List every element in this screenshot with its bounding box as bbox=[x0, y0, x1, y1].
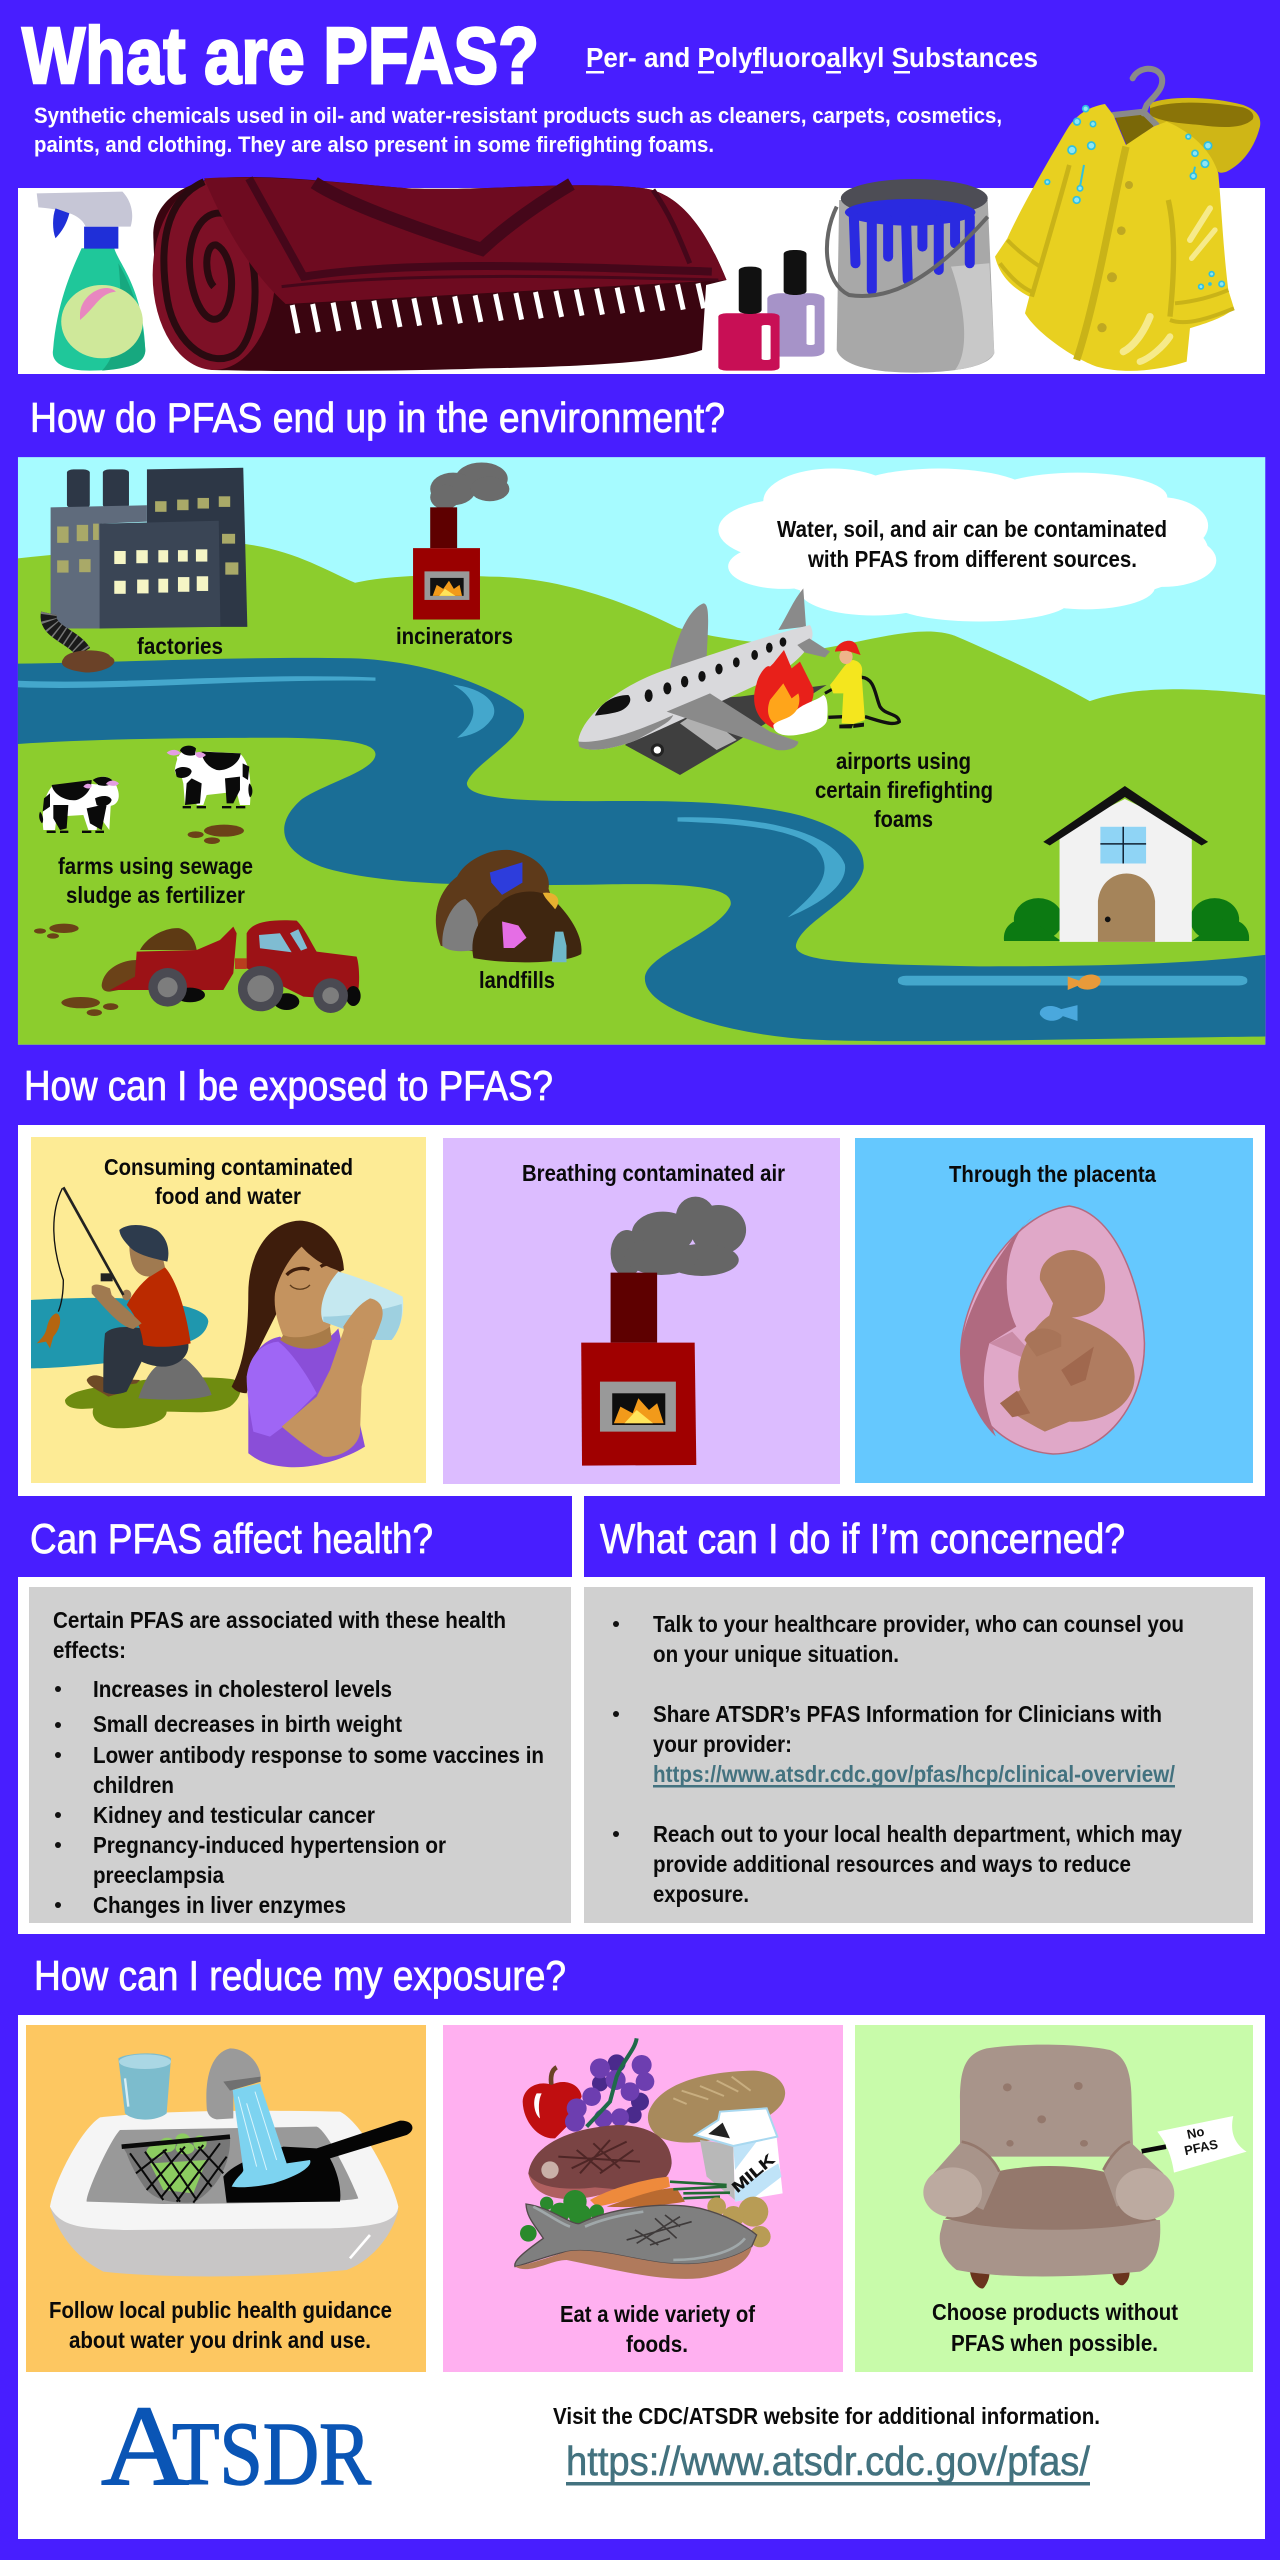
text: placenta: Through the placenta bbox=[949, 1161, 1156, 1187]
panel: health effects: children bbox=[93, 1772, 174, 1798]
title: What are PFAS? bbox=[22, 11, 539, 100]
text: airports bbox=[815, 748, 993, 832]
text: farms bbox=[58, 853, 253, 908]
text: product advice: PFAS when possible. bbox=[951, 2330, 1158, 2356]
heading: environment: How do PFAS end up in the environment? bbox=[30, 394, 725, 441]
panel: product strip bbox=[18, 188, 1265, 374]
icon: food pile bbox=[515, 2038, 785, 2279]
panel: health effects: Pregnancy-induced hypertension or bbox=[93, 1832, 446, 1858]
text: water guidance bbox=[49, 2297, 392, 2353]
text: farms: farms using sewage bbox=[58, 853, 253, 879]
panel: health effects: effects: bbox=[53, 1637, 126, 1663]
icon: sink bbox=[50, 2048, 412, 2276]
panel: exposure routes bbox=[18, 1125, 1265, 1496]
icon: paint can bbox=[827, 179, 994, 373]
subtitle: Per- and Polyfluoroalkyl Substances: Per- and Polyfluoroalkyl Substances bbox=[586, 42, 1038, 73]
text: product advice: Choose products without bbox=[932, 2299, 1178, 2325]
text: food advice bbox=[560, 2301, 755, 2357]
icon: factory bbox=[49, 468, 247, 673]
icon: landfill bbox=[436, 850, 582, 962]
text: incinerators: incinerators bbox=[396, 623, 513, 649]
heading: reduce: How can I reduce my exposure? bbox=[34, 1952, 566, 1999]
panel: what to do: exposure. bbox=[653, 1881, 749, 1907]
text: water guidance: about water you drink and use. bbox=[69, 2327, 371, 2353]
panel: what to do bbox=[584, 1587, 1253, 1923]
panel: what to do: https://www.atsdr.cdc.gov/pfas/hcp/clinical-overview/ bbox=[653, 1761, 1176, 1787]
card: placenta bbox=[855, 1138, 1253, 1483]
text: consuming: food and water bbox=[155, 1183, 301, 1209]
card: water bbox=[26, 2025, 426, 2372]
intro text: paints, and clothing. They are also present in some firefighting foams. bbox=[34, 132, 714, 157]
card: food bbox=[443, 2025, 843, 2372]
text: factories: factories bbox=[137, 633, 223, 659]
icon: armchair bbox=[923, 2045, 1247, 2289]
text: landfills: landfills bbox=[479, 967, 555, 993]
text: water guidance: Follow local public health guidance bbox=[49, 2297, 392, 2323]
text: flag: No bbox=[1186, 2124, 1206, 2142]
text: flag bbox=[1183, 2124, 1220, 2158]
panel: health effects bbox=[29, 1587, 571, 1923]
icon: incinerator bbox=[413, 462, 509, 620]
panel: health effects: Certain PFAS are associated with these health bbox=[53, 1607, 506, 1633]
heading: concerned: What can I do if I’m concerned? bbox=[600, 1515, 1125, 1562]
icon: rolled carpet bbox=[153, 177, 727, 371]
logo: ATSDR: A bbox=[101, 2382, 189, 2509]
panel: health effects: Increases in cholesterol levels bbox=[93, 1676, 392, 1702]
text: food advice: foods. bbox=[626, 2331, 688, 2357]
heading: exposure: How can I be exposed to PFAS? bbox=[24, 1062, 553, 1109]
text: breathing: Breathing contaminated air bbox=[522, 1160, 785, 1186]
card: food and water bbox=[31, 1137, 426, 1483]
icon: incinerator with smoke bbox=[581, 1197, 746, 1466]
icon: house bbox=[1004, 786, 1249, 942]
link: website url: https://www.atsdr.cdc.gov/pfas/ bbox=[566, 2438, 1091, 2484]
text: food advice: Eat a wide variety of bbox=[560, 2301, 755, 2327]
panel: what to do: on your unique situation. bbox=[653, 1641, 899, 1667]
intro text: Synthetic chemicals used in oil- and water-resistant products such as cleaners, carpets, cosmetics, bbox=[34, 103, 1002, 128]
text: cloud message bbox=[777, 516, 1167, 572]
panel: health and actions bbox=[18, 1577, 1265, 1934]
panel: what to do: Talk to your healthcare provider, who can counsel you bbox=[653, 1611, 1184, 1637]
heading: health: Can PFAS affect health? bbox=[30, 1515, 433, 1562]
icon: fish bbox=[1040, 975, 1101, 1021]
card: products bbox=[855, 2025, 1253, 2372]
icon: spray bottle bbox=[37, 192, 145, 371]
panel: reduce exposure and footer bbox=[18, 2015, 1265, 2539]
text: consuming bbox=[104, 1154, 353, 1209]
text: cloud message: with PFAS from different sources. bbox=[807, 546, 1137, 572]
panel: health effects: Small decreases in birth weight bbox=[93, 1711, 402, 1737]
panel: what to do: your provider: bbox=[653, 1731, 792, 1757]
icon: cows, sludge and tractor bbox=[34, 746, 361, 1016]
text: consuming: Consuming contaminated bbox=[104, 1154, 353, 1180]
callout: cloud bbox=[718, 469, 1216, 622]
panel: what to do: Share ATSDR’s PFAS Information for Clinicians with bbox=[653, 1701, 1162, 1727]
panel: health effects: Lower antibody response to some vaccines in bbox=[93, 1742, 544, 1768]
icon: food pile: MILK bbox=[729, 2151, 778, 2196]
icon: yellow raincoat bbox=[995, 69, 1260, 371]
icon: nail polish bbox=[718, 250, 824, 371]
hills bbox=[18, 544, 1265, 1045]
panel: environment scene bbox=[18, 457, 1265, 1045]
text: farms: sludge as fertilizer bbox=[66, 882, 245, 908]
intro text bbox=[34, 103, 1002, 157]
text: product advice bbox=[932, 2299, 1178, 2356]
icon: fisherman and woman drinking bbox=[31, 1187, 403, 1467]
text: airports: airports using bbox=[836, 748, 971, 774]
card: air bbox=[443, 1138, 840, 1484]
panel: what to do: Reach out to your local health department, which may bbox=[653, 1821, 1182, 1847]
icon: products illustrations bbox=[37, 177, 994, 373]
text: airports: foams bbox=[874, 806, 933, 832]
divider between header boxes bbox=[572, 1496, 584, 1578]
panel: health effects: preeclampsia bbox=[93, 1862, 224, 1888]
text: cloud message: Water, soil, and air can be contaminated bbox=[777, 516, 1167, 542]
icon: plane on fire with firefighter bbox=[578, 588, 899, 775]
icon: fetus in placenta bbox=[961, 1206, 1144, 1454]
text: flag: PFAS bbox=[1183, 2136, 1220, 2158]
text: visit website: Visit the CDC/ATSDR website for additional information. bbox=[553, 2403, 1100, 2429]
river bbox=[18, 658, 1265, 1041]
panel: what to do: provide additional resources and ways to reduce bbox=[653, 1851, 1131, 1877]
text: airports: certain firefighting bbox=[815, 777, 993, 803]
logo: ATSDR: TSDR bbox=[172, 2405, 371, 2504]
logo: ATSDR bbox=[101, 2382, 371, 2509]
panel: health effects: Changes in liver enzymes bbox=[93, 1892, 346, 1918]
panel: health effects: Kidney and testicular cancer bbox=[93, 1802, 375, 1828]
